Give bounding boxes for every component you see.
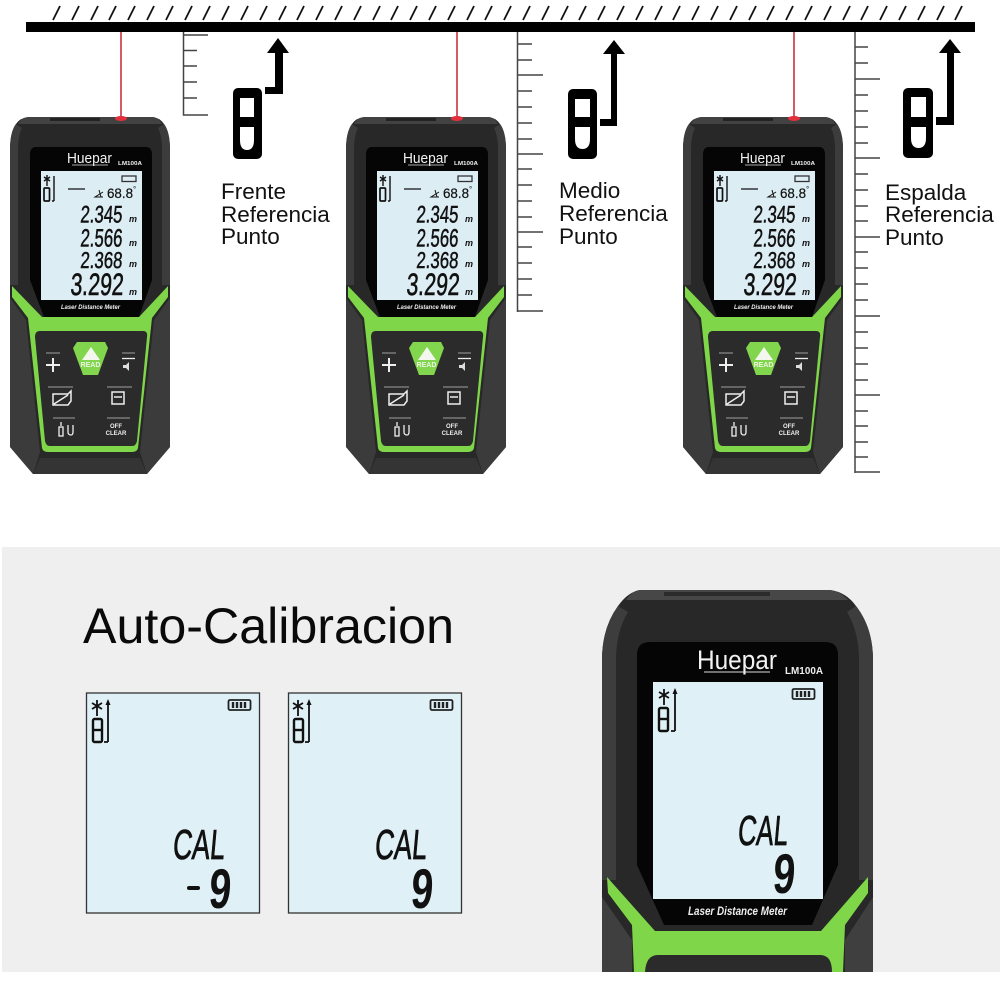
LCD screen: m bbox=[129, 214, 137, 224]
keypad: CLEAR bbox=[106, 431, 127, 437]
LCD panel: CAL 9 bbox=[288, 693, 462, 920]
label: Frente Referencia Punto: Referencia bbox=[221, 202, 330, 227]
label: Espalda Referencia Punto: Punto bbox=[885, 225, 944, 250]
keypad: CLEAR bbox=[442, 431, 463, 437]
LCD screen: 2.566 bbox=[80, 225, 124, 252]
LCD screen: m bbox=[129, 238, 137, 248]
device 3: laser meter back reference bbox=[683, 116, 843, 474]
ruler 1 bbox=[183, 32, 208, 116]
laser beam 1 bbox=[120, 32, 122, 118]
LCD screen: 9 bbox=[771, 842, 798, 905]
LCD screen: m bbox=[802, 238, 810, 248]
LCD screen: 68.8 bbox=[107, 185, 133, 201]
LCD screen: 68.8 bbox=[780, 185, 806, 201]
brand logo: Huepar bbox=[697, 645, 777, 675]
label: Espalda Referencia Punto: Espalda bbox=[885, 180, 967, 205]
LCD screen: m bbox=[129, 259, 137, 269]
LCD screen: 3.292 bbox=[70, 267, 125, 302]
keypad bbox=[35, 331, 147, 446]
device 2: laser meter middle reference bbox=[346, 116, 506, 474]
label: Frente Referencia Punto: Frente bbox=[221, 179, 286, 204]
large device close-up bbox=[602, 590, 873, 972]
laser beam 2 bbox=[456, 32, 458, 118]
LCD screen: CAL bbox=[736, 807, 790, 854]
product caption: Laser Distance Meter bbox=[688, 906, 787, 918]
LCD panel: CAL -9: 9 bbox=[207, 857, 234, 920]
keypad bbox=[708, 331, 820, 446]
LCD screen: 2.368 bbox=[753, 247, 796, 273]
keypad: READ bbox=[417, 362, 436, 369]
laser beam 3 bbox=[793, 32, 795, 118]
ruler 2 bbox=[517, 32, 543, 312]
LCD screen: 3.292 bbox=[743, 267, 798, 302]
device 1: laser meter front reference bbox=[10, 116, 170, 474]
keypad: OFF bbox=[446, 424, 458, 430]
LCD screen: m bbox=[802, 287, 810, 297]
keypad top edge bbox=[645, 955, 832, 972]
label: Espalda Referencia Punto: Referencia bbox=[885, 202, 994, 227]
LCD panel: CAL 9: CAL bbox=[373, 821, 429, 868]
LCD screen: 2.345 bbox=[416, 202, 459, 228]
LCD screen: 2.566 bbox=[753, 225, 797, 252]
LCD screen: 2.368 bbox=[416, 247, 459, 273]
keypad: READ bbox=[81, 362, 100, 369]
LCD screen: m bbox=[465, 259, 473, 269]
label: Medio Referencia Punto: Referencia bbox=[559, 201, 668, 226]
keypad: OFF bbox=[783, 424, 795, 430]
label: Medio Referencia Punto: Medio bbox=[559, 178, 620, 203]
label: Medio Referencia Punto: Punto bbox=[559, 224, 618, 249]
icon: front reference point bbox=[233, 38, 289, 159]
model label: LM100A bbox=[785, 665, 823, 677]
brand logo: Huepar bbox=[67, 150, 112, 167]
LCD panel: CAL 9: 9 bbox=[409, 857, 436, 920]
brand logo: Huepar bbox=[740, 150, 785, 167]
LCD screen: ° bbox=[133, 185, 136, 194]
LCD screen bbox=[653, 682, 823, 905]
LCD screen: ° bbox=[806, 185, 809, 194]
brand logo: Huepar bbox=[403, 150, 448, 167]
product caption: Laser Distance Meter bbox=[61, 304, 120, 311]
LCD screen: m bbox=[465, 238, 473, 248]
model label: LM100A bbox=[118, 161, 142, 167]
LCD screen: m bbox=[802, 214, 810, 224]
heading: Auto-Calibracion: Auto-Calibracion bbox=[83, 598, 454, 654]
LCD screen bbox=[377, 171, 478, 302]
LCD screen: 2.368 bbox=[80, 247, 123, 273]
label: Frente Referencia Punto: Punto bbox=[221, 224, 280, 249]
LCD panel: CAL -9 bbox=[86, 693, 260, 920]
LCD screen: m bbox=[129, 287, 137, 297]
LCD screen: 2.566 bbox=[416, 225, 460, 252]
keypad: OFF bbox=[110, 424, 122, 430]
ruler 3 bbox=[855, 32, 880, 473]
keypad bbox=[371, 331, 483, 446]
LCD panel: CAL -9: CAL bbox=[171, 821, 227, 868]
keypad: READ bbox=[754, 362, 773, 369]
wall with hatching bbox=[26, 6, 975, 32]
LCD screen bbox=[714, 171, 815, 302]
keypad: CLEAR bbox=[779, 431, 800, 437]
model label: LM100A bbox=[454, 161, 478, 167]
LCD screen: m bbox=[802, 259, 810, 269]
LCD screen: 68.8 bbox=[443, 185, 469, 201]
LCD screen: 3.292 bbox=[406, 267, 461, 302]
LCD screen: 2.345 bbox=[753, 202, 796, 228]
LCD screen bbox=[41, 171, 142, 302]
LCD screen: m bbox=[465, 287, 473, 297]
product caption: Laser Distance Meter bbox=[397, 304, 456, 311]
LCD screen: m bbox=[465, 214, 473, 224]
icon: back reference point bbox=[903, 39, 961, 158]
LCD screen: ° bbox=[469, 185, 472, 194]
panel: auto calibration bbox=[2, 547, 1000, 972]
model label: LM100A bbox=[791, 161, 815, 167]
product caption: Laser Distance Meter bbox=[734, 304, 793, 311]
LCD screen: 2.345 bbox=[80, 202, 123, 228]
icon: middle reference point bbox=[568, 40, 625, 159]
